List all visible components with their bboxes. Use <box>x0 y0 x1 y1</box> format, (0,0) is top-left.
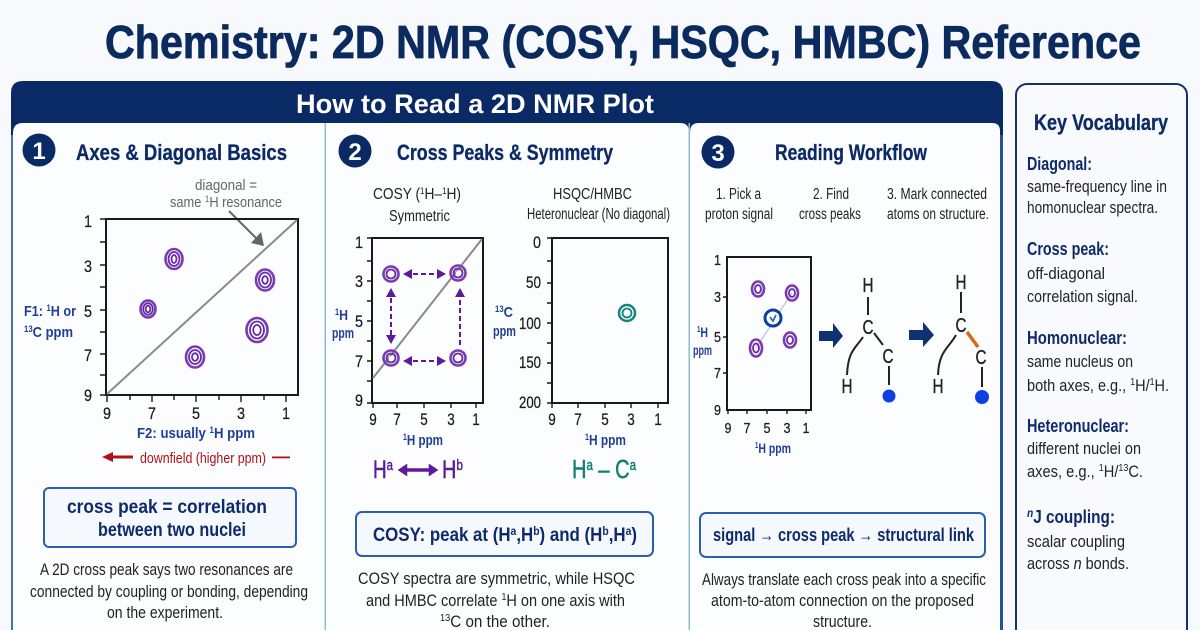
term: homonuclear <box>1027 328 1169 395</box>
COSY y axis label: 1 <box>335 307 339 317</box>
HSQC/HMBC subtitle: Heteronuclear (No diagonal) <box>527 206 670 223</box>
COSY y axis numbers: 1 <box>355 234 363 252</box>
teal peak <box>619 305 635 321</box>
term: diagonal <box>1027 154 1167 217</box>
workflow y axis label: 1 <box>697 325 701 334</box>
peak <box>186 346 204 368</box>
term: diagonal: Diagonal: <box>1027 154 1092 174</box>
workflow x axis numbers <box>724 420 810 437</box>
downfield arrow: downfield (higher ppm) <box>140 450 266 467</box>
COSY y axis label <box>332 307 354 342</box>
term: heteronuclear: 13 <box>1118 463 1129 474</box>
peak <box>166 249 182 269</box>
panel: key vocabulary <box>1016 84 1187 630</box>
HSQC y axis numbers: 50 <box>526 274 541 292</box>
step 2 label: cross peaks <box>799 206 861 223</box>
callout: COSY peak <box>356 512 653 556</box>
panel: axes and diagonal basics <box>22 134 308 622</box>
plot: HSQC/HMBC <box>547 238 668 408</box>
step 1 label <box>705 186 773 223</box>
workflow x axis numbers: 3 <box>784 420 790 437</box>
diagonal annotation: 1 <box>205 194 209 204</box>
peak <box>450 266 466 280</box>
left border <box>11 135 14 630</box>
relation: Ha to Ca: – C <box>593 454 630 484</box>
heading 2: Cross Peaks & Symmetry <box>397 140 614 165</box>
workflow x axis numbers: 1 <box>802 420 810 437</box>
molecule: marked structure: C <box>956 315 966 337</box>
HSQC x axis numbers: 3 <box>627 411 635 429</box>
term: homonuclear: 1 <box>1150 377 1155 388</box>
peak <box>752 282 764 296</box>
workflow x axis label: H ppm <box>758 440 791 456</box>
HSQC x axis numbers: 9 <box>548 411 556 429</box>
COSY x axis numbers: 7 <box>393 411 401 429</box>
F1 axis label: F1: <box>24 303 46 320</box>
term: heteronuclear: C. <box>1128 463 1143 481</box>
HSQC x axis label: H ppm <box>589 432 626 449</box>
term: nJ coupling: scalar coupling <box>1027 533 1125 551</box>
peak <box>140 300 156 318</box>
callout: COSY peak: a <box>626 524 632 538</box>
term: diagonal: homonuclear spectra. <box>1027 199 1158 217</box>
molecule: unmarked structure: C <box>882 346 894 368</box>
relation: Ha to Hb: H <box>373 456 391 484</box>
HSQC x axis numbers <box>548 411 662 429</box>
term: homonuclear: same nucleus on <box>1027 353 1133 371</box>
relation: Ha to Hb <box>373 456 463 484</box>
term: nJ coupling: J coupling: <box>1033 507 1115 527</box>
workflow x axis numbers: 7 <box>744 420 750 437</box>
step 3 label <box>887 186 989 223</box>
diagonal annotation: same <box>170 195 205 211</box>
step 2 label: 2. Find <box>813 186 849 203</box>
workflow y axis label <box>693 324 712 358</box>
callout: COSY peak: ) <box>631 524 637 546</box>
workflow x axis numbers: 5 <box>764 420 770 437</box>
text block: explanation 1: A 2D cross peak says two resonances are <box>40 561 293 579</box>
HSQC y axis numbers: 150 <box>519 354 541 372</box>
COSY y axis numbers: 5 <box>355 313 363 331</box>
main panel: how to read a 2D NMR plot <box>11 81 1003 630</box>
step badge 1 <box>22 134 56 166</box>
y axis numbers: 9 <box>84 387 92 405</box>
plot: COSY <box>367 238 483 408</box>
callout: workflow summary <box>700 513 985 557</box>
F1 axis label: 13 <box>24 324 33 334</box>
term: cross peak: correlation signal. <box>1027 288 1138 306</box>
COSY x axis numbers: 9 <box>369 411 377 429</box>
step 2 label <box>799 186 861 223</box>
COSY subtitle: H) <box>447 186 461 203</box>
COSY y axis numbers: 7 <box>355 353 363 371</box>
callout: COSY peak: a <box>511 524 517 538</box>
COSY subtitle: COSY ( <box>373 186 426 203</box>
COSY subtitle: 1 <box>442 186 447 196</box>
main panel frame <box>11 81 1003 630</box>
y axis numbers: 1 <box>84 213 92 231</box>
term: homonuclear: H/ <box>1135 377 1150 395</box>
HSQC y axis numbers: 200 <box>519 394 541 412</box>
COSY y axis label: H <box>339 307 348 324</box>
workflow y axis label: H <box>700 324 708 340</box>
callout: cross peak definition <box>44 488 296 547</box>
HSQC x axis numbers: 7 <box>574 411 582 429</box>
F2 axis label: F2: usually <box>137 425 215 442</box>
term: heteronuclear: different nuclei on <box>1027 440 1141 458</box>
panel 1 background <box>13 123 325 630</box>
callout: COSY peak: ) and (H <box>540 524 602 546</box>
term: heteronuclear: 1 <box>1099 463 1104 474</box>
text block: explanation 3 <box>702 571 986 630</box>
HSQC x axis label: 1 <box>585 432 589 442</box>
F1 axis label: H or <box>51 303 76 320</box>
x axis numbers: 7 <box>148 405 156 423</box>
panel 2 background <box>326 123 689 630</box>
relation: Ha to Hb: H <box>442 456 460 484</box>
relation: Ha to Hb: b <box>456 457 463 474</box>
HSQC y axis label: C <box>504 304 513 321</box>
COSY subtitle <box>373 186 461 225</box>
text block: explanation 1: on the experiment. <box>107 604 223 622</box>
workflow y axis numbers: 9 <box>714 402 721 419</box>
peak <box>450 350 466 366</box>
callout: COSY peak: ,H <box>516 524 533 546</box>
y axis numbers: 3 <box>84 258 92 276</box>
term: cross peak: off-diagonal <box>1027 265 1105 283</box>
workflow y axis numbers <box>714 252 721 419</box>
step badge 2: 2 <box>348 139 362 166</box>
term: homonuclear: 1 <box>1130 377 1135 388</box>
panel: reading workflow <box>693 136 989 630</box>
panel 3 background <box>690 123 1000 630</box>
peak <box>256 270 274 290</box>
workflow y axis numbers: 1 <box>714 252 721 269</box>
workflow x axis numbers: 9 <box>724 420 732 437</box>
callout: COSY peak: b <box>533 524 540 538</box>
text block: explanation 3: atom-to-atom connection on the proposed <box>711 592 974 610</box>
panel header title: How to Read a 2D NMR Plot <box>296 89 654 119</box>
molecule: marked structure <box>932 272 989 404</box>
text block: explanation 2: H on one axis with <box>506 592 625 610</box>
peak <box>246 318 268 342</box>
arrow: points to diagonal <box>229 211 264 246</box>
COSY x axis numbers <box>369 411 480 429</box>
dashed connections <box>391 274 460 361</box>
term: homonuclear: Homonuclear: <box>1027 328 1127 348</box>
F2 axis label: 1 <box>210 425 214 435</box>
peak <box>786 286 798 300</box>
selected proton signal <box>765 310 781 326</box>
molecule: marked structure: C <box>976 347 986 369</box>
term: diagonal: same-frequency line in <box>1027 178 1167 196</box>
F2 axis label: H ppm <box>214 425 255 442</box>
x axis numbers: 9 <box>103 405 111 423</box>
molecule: marked structure: H <box>956 272 966 294</box>
term: nJ coupling: n <box>1027 506 1033 520</box>
text block: explanation 2 <box>358 570 635 630</box>
term: homonuclear: both axes, e.g., <box>1027 377 1140 395</box>
workflow y axis numbers: 3 <box>714 289 721 306</box>
molecule: unmarked structure <box>842 275 896 402</box>
COSY subtitle: 1 <box>420 186 425 196</box>
text block: explanation 1 <box>30 561 308 622</box>
HSQC y axis numbers <box>519 234 541 412</box>
y axis numbers <box>84 213 92 405</box>
step badge 3 <box>702 136 734 168</box>
text block: explanation 2: COSY spectra are symmetric, while HSQC <box>358 570 635 588</box>
HSQC/HMBC subtitle <box>527 186 670 223</box>
HSQC/HMBC subtitle: HSQC/HMBC <box>553 186 632 203</box>
molecule: unmarked structure: C <box>862 317 874 339</box>
molecule: marked structure: H <box>932 376 944 398</box>
COSY x axis label: H ppm <box>407 432 443 449</box>
callout: workflow summary: signal → cross peak → structural link <box>713 525 975 545</box>
relation: Ha to Ca: a <box>630 457 637 474</box>
panel: cross peaks and symmetry <box>332 134 670 630</box>
F1 axis label: 1 <box>46 303 51 313</box>
F1 axis label <box>24 303 76 341</box>
workflow y axis numbers: 5 <box>714 329 721 346</box>
term: heteronuclear: Heteronuclear: <box>1027 416 1129 436</box>
callout: cross peak definition: cross peak = correlation <box>67 496 267 518</box>
vocabulary heading: Key Vocabulary <box>1034 110 1169 135</box>
term: heteronuclear: H/ <box>1104 463 1119 481</box>
workflow y axis numbers: 7 <box>714 365 721 382</box>
COSY y axis numbers <box>355 234 363 410</box>
COSY x axis numbers: 1 <box>472 411 480 429</box>
x axis numbers: 5 <box>192 405 200 423</box>
step 3 label: atoms on structure. <box>887 206 989 223</box>
x axis numbers: 1 <box>282 405 290 423</box>
COSY x axis numbers: 5 <box>420 411 428 429</box>
term: cross peak: Cross peak: <box>1027 239 1109 259</box>
diagonal annotation: H resonance <box>209 195 282 211</box>
molecule: unmarked structure: H <box>862 275 874 297</box>
term: homonuclear: H. <box>1154 377 1169 395</box>
y axis numbers: 5 <box>84 303 92 321</box>
workflow x axis label: 1 <box>755 441 759 450</box>
text block: explanation 2: and HMBC correlate <box>366 592 515 610</box>
arrow: to first structure <box>819 323 843 348</box>
arrow: to marked structure <box>909 322 934 347</box>
term: cross peak <box>1027 239 1138 306</box>
peak <box>384 266 398 282</box>
text block: explanation 1: connected by coupling or bonding, depending <box>30 583 308 601</box>
term: heteronuclear: axes, e.g., <box>1027 463 1103 481</box>
HSQC x axis numbers: 5 <box>601 411 609 429</box>
COSY subtitle: Symmetric <box>389 208 450 225</box>
step 1 label: 1. Pick a <box>716 186 761 203</box>
callout: COSY peak: ,H <box>609 524 626 546</box>
heading 1: Axes & Diagonal Basics <box>76 140 287 165</box>
peak <box>384 350 398 366</box>
COSY x axis label: 1 <box>403 432 407 442</box>
F1 axis label: C ppm <box>33 324 73 341</box>
step badge 1: 1 <box>32 138 46 165</box>
HSQC y axis numbers: 100 <box>519 315 541 333</box>
x axis numbers <box>103 405 290 423</box>
COSY y axis numbers: 9 <box>355 392 363 410</box>
COSY x axis numbers: 3 <box>447 411 455 429</box>
plot: workflow spectrum <box>723 257 811 414</box>
relation: Ha to Ca: a <box>586 457 593 474</box>
term: nJ coupling <box>1027 506 1129 573</box>
relation: Ha to Ca: H <box>572 454 591 484</box>
COSY subtitle: H– <box>425 186 442 203</box>
HSQC y axis numbers: 0 <box>533 234 541 252</box>
molecule: unmarked structure: H <box>842 376 852 398</box>
text block: explanation 2: 1 <box>502 592 507 603</box>
term: nJ coupling: across n bonds. <box>1027 555 1129 573</box>
callout: cross peak definition: between two nuclei <box>98 519 246 541</box>
x axis numbers: 3 <box>237 405 245 423</box>
right border <box>1000 135 1003 630</box>
COSY y axis numbers: 3 <box>355 273 363 291</box>
peak <box>750 340 762 356</box>
text block: explanation 3: Always translate each cross peak into a specific <box>702 571 986 589</box>
HSQC y axis label: ppm <box>493 323 516 340</box>
diagonal annotation <box>170 178 282 211</box>
workflow y axis label: ppm <box>693 342 712 358</box>
HSQC y axis label <box>493 304 516 340</box>
peak <box>784 332 796 348</box>
plot: axes diagram <box>100 219 298 402</box>
step badge 3: 3 <box>711 140 725 167</box>
diagonal annotation: diagonal = <box>195 178 257 194</box>
text block: explanation 2: 13 <box>440 613 451 624</box>
heading 3: Reading Workflow <box>775 140 928 165</box>
relation: Ha to Hb: a <box>387 457 393 474</box>
term: heteronuclear <box>1027 416 1143 481</box>
step badge 2 <box>338 134 372 168</box>
HSQC x axis numbers: 1 <box>654 411 662 429</box>
step 1 label: proton signal <box>705 206 773 223</box>
callout: COSY peak: b <box>602 524 609 538</box>
COSY y axis label: ppm <box>332 325 354 342</box>
HSQC y axis label: 13 <box>495 304 504 314</box>
vocabulary frame <box>1016 84 1187 630</box>
y axis numbers: 7 <box>84 347 92 365</box>
callout: COSY peak: COSY: peak at (H <box>373 524 532 546</box>
step 3 label: 3. Mark connected <box>887 186 987 203</box>
